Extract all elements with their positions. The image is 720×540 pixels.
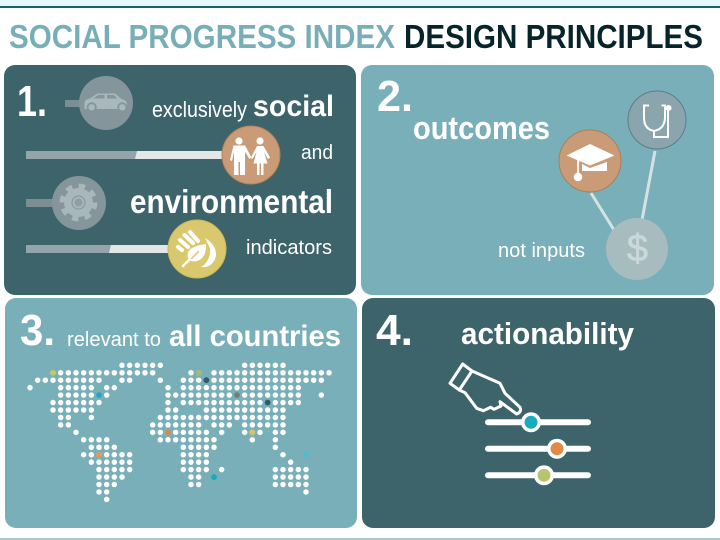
icon: hand and leaf: [168, 220, 226, 278]
title: SOCIAL PROGRESS INDEX: [9, 18, 395, 55]
text: relevant to all countries: all countries: [169, 320, 341, 353]
text: not inputs: not inputs: [498, 240, 585, 262]
title: [9, 18, 703, 55]
panel: 4 actionability: [362, 298, 715, 528]
icon: dollar: [606, 218, 668, 280]
icon: graduation cap: [559, 130, 621, 192]
text: relevant to all countries: relevant to: [67, 329, 161, 351]
dotted world map: [30, 365, 329, 499]
text: indicators: indicators: [246, 237, 332, 259]
number 2: 2.: [377, 72, 413, 121]
text: exclusively social: [152, 90, 334, 123]
panel: 2 outcomes not inputs: [361, 65, 714, 295]
text: and: and: [301, 142, 333, 164]
icon: stethoscope: [628, 91, 686, 149]
connector lines: [591, 151, 655, 230]
text: exclusively social: exclusively: [152, 97, 247, 122]
number 1: 1.: [17, 77, 47, 126]
panel: 1 social and environmental indicators: [4, 65, 356, 295]
text: actionability: actionability: [461, 316, 635, 351]
number 3: 3.: [20, 306, 55, 355]
text: relevant to all countries: [67, 320, 341, 353]
icon: gear: [26, 176, 106, 230]
number 4: 4.: [376, 306, 413, 355]
panel: 3 relevant to all countries: [5, 298, 357, 528]
text: outcomes: outcomes: [413, 110, 550, 146]
icon: dollar: $: [627, 228, 648, 270]
slider: social track: [26, 151, 226, 159]
icon: people: [222, 126, 280, 184]
slider controls: [488, 412, 588, 485]
icon: pointing hand: [450, 364, 521, 414]
slider: environmental track: [26, 245, 174, 253]
text: exclusively social: social: [253, 90, 334, 123]
text: environmental: environmental: [130, 183, 333, 220]
icon: car: [65, 76, 133, 130]
